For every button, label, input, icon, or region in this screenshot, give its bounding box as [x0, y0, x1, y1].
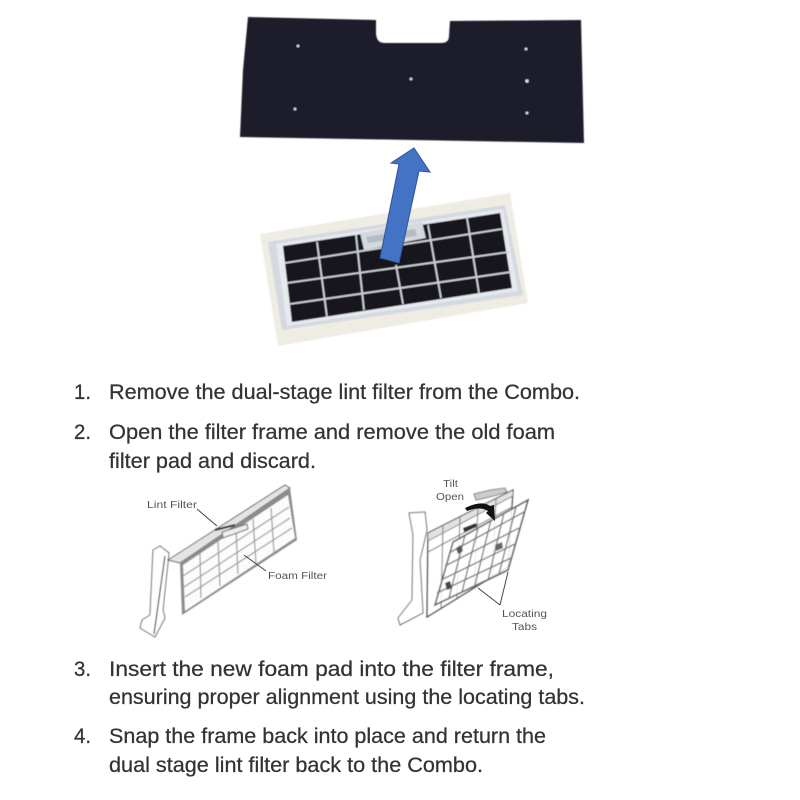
step 1: 1.	[74, 381, 91, 404]
leader lines	[197, 509, 266, 571]
step 3: ensuring proper alignment using the locating tabs.	[109, 686, 585, 709]
label: locating tabs: Locating	[502, 609, 547, 620]
leader lines	[478, 572, 508, 605]
label: locating tabs: Tabs	[512, 622, 537, 633]
blue arrow	[380, 148, 430, 263]
step 3	[74, 658, 585, 709]
step 4: Snap the frame back into place and return the	[109, 725, 546, 748]
diagram: lint filter and foam filter	[140, 485, 328, 637]
step 3: Insert the new foam pad into the filter frame,	[109, 658, 554, 681]
label: locating tabs	[502, 609, 547, 633]
diagram: tilt open with locating tabs	[398, 479, 547, 633]
label: tilt open	[436, 479, 464, 503]
step 2: Open the filter frame and remove the old foam	[109, 421, 555, 444]
step 4: dual stage lint filter back to the Combo.	[109, 754, 483, 777]
label: tilt open: Open	[436, 492, 464, 503]
step 1: Remove the dual-stage lint filter from the Combo.	[109, 381, 580, 404]
label: foam filter: Foam Filter	[268, 571, 328, 582]
lint filter frame photo	[260, 193, 528, 346]
foam filter pad photo	[240, 17, 584, 143]
step 2: filter pad and discard.	[109, 450, 316, 473]
tilt arrow	[465, 503, 495, 521]
label: tilt open: Tilt	[443, 479, 458, 490]
step 2	[74, 421, 555, 473]
step 4: 4.	[74, 725, 91, 748]
step 2: 2.	[74, 421, 91, 444]
step 4	[74, 725, 546, 777]
label: lint filter: Lint Filter	[147, 500, 198, 511]
step 3: 3.	[74, 658, 91, 681]
